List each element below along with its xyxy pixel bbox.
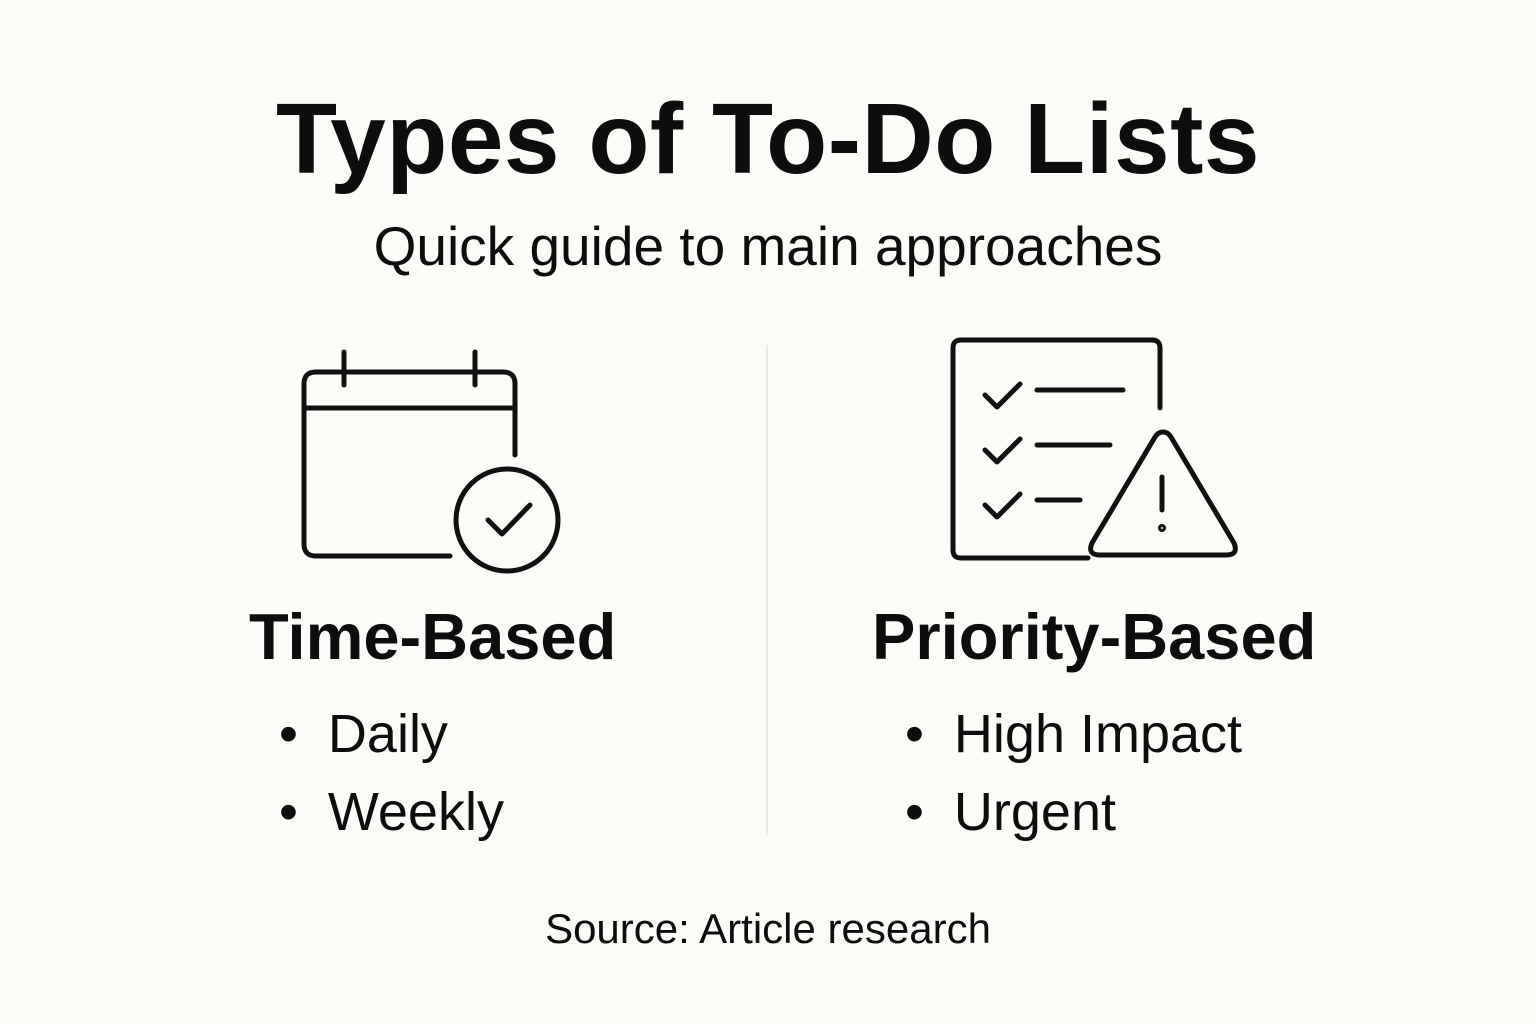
heading: time-based: Time-Based (249, 600, 616, 673)
list: priority-based: • High Impact (905, 704, 1242, 764)
heading: priority-based: Priority-Based (872, 600, 1316, 673)
list: priority-based: • Urgent (905, 782, 1116, 842)
list: priority-based (905, 704, 1242, 842)
list: time-based: • Weekly (279, 782, 504, 842)
source: Source: Article research (545, 905, 991, 952)
list: time-based: • Daily (279, 704, 448, 764)
title: Types of To-Do Lists (276, 83, 1260, 195)
list: time-based (279, 704, 504, 842)
subtitle: Quick guide to main approaches (374, 215, 1162, 277)
